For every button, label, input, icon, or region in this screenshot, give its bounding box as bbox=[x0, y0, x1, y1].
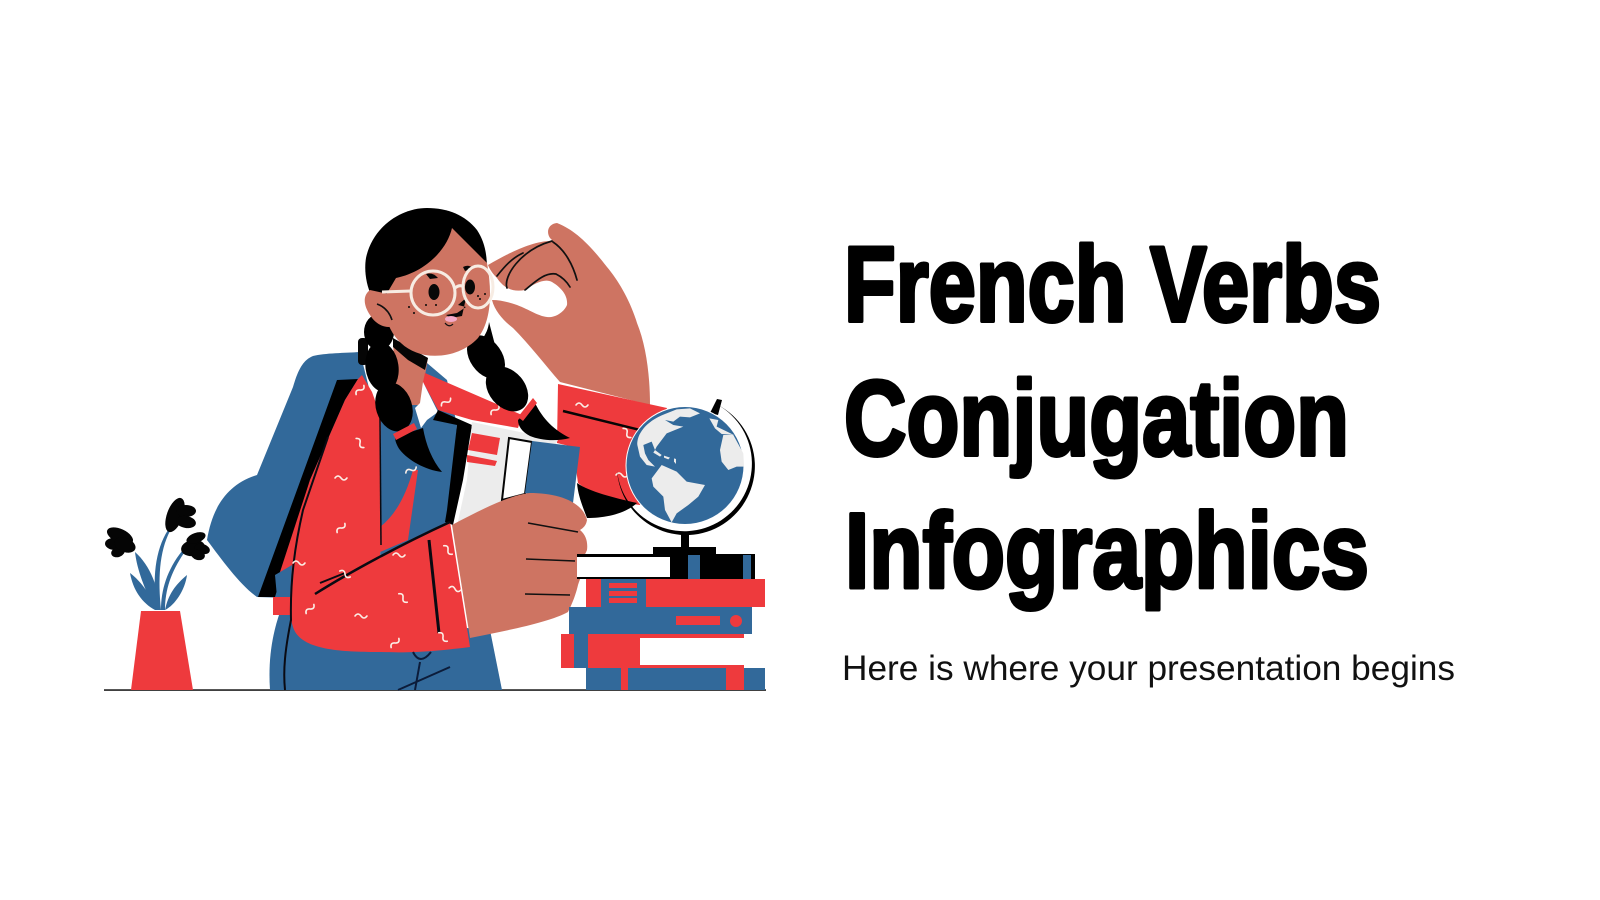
jacket squiggles bbox=[293, 384, 632, 649]
skin arm raised bbox=[488, 223, 650, 405]
eyebrow right bbox=[463, 266, 473, 271]
lower sleeve bbox=[290, 522, 470, 652]
mouth bbox=[445, 316, 457, 322]
white pages bbox=[502, 438, 532, 500]
continents bbox=[637, 408, 744, 522]
glasses bbox=[382, 266, 493, 315]
neck shadow bbox=[393, 338, 428, 370]
blue book label bbox=[676, 616, 720, 625]
right braid band bbox=[518, 398, 537, 421]
blue book dot bbox=[730, 615, 742, 627]
braid tail bbox=[518, 403, 570, 440]
title line 2: Conjugation bbox=[844, 358, 1349, 478]
jeans bbox=[269, 612, 502, 690]
nose bbox=[446, 298, 466, 318]
ear bbox=[365, 290, 398, 327]
blue book cover bbox=[525, 441, 580, 503]
bottom book bbox=[586, 668, 765, 690]
third book bbox=[561, 634, 744, 668]
top book band bbox=[688, 555, 700, 579]
third book pages bbox=[640, 638, 744, 665]
left braid band bbox=[393, 423, 417, 440]
top book band two bbox=[743, 555, 751, 579]
title line 1: French Verbs bbox=[844, 224, 1381, 344]
zipper pull bbox=[398, 652, 450, 690]
jacket hem bbox=[273, 597, 291, 615]
top book bbox=[577, 554, 755, 579]
globe pin bbox=[710, 399, 722, 415]
braid tail bbox=[395, 428, 442, 472]
grey book bbox=[455, 422, 558, 535]
vest blue patch bbox=[275, 565, 292, 597]
finger lines bbox=[497, 241, 577, 290]
sleeve fold line bbox=[563, 411, 640, 430]
globe bbox=[626, 406, 744, 525]
jacket lines bbox=[284, 417, 450, 690]
hair back bbox=[365, 208, 487, 320]
icon: potted plant bbox=[104, 495, 211, 690]
ground line bbox=[104, 689, 766, 691]
globe ocean bbox=[626, 407, 744, 524]
elbow shadow bbox=[577, 483, 637, 518]
plant stems and leaves bbox=[130, 530, 187, 610]
freckles bbox=[408, 293, 486, 314]
blue book bbox=[569, 607, 752, 634]
hand holding books bbox=[452, 493, 587, 638]
red book band bbox=[601, 579, 646, 607]
vase bbox=[131, 611, 193, 690]
bottom book band two bbox=[726, 668, 744, 690]
globe light rim bbox=[626, 406, 744, 525]
third book band bbox=[574, 634, 588, 668]
flowers bbox=[104, 495, 211, 562]
tie bbox=[380, 470, 418, 552]
globe base bbox=[653, 547, 716, 555]
face bbox=[383, 228, 490, 356]
backpack bbox=[207, 352, 372, 598]
collar bbox=[415, 382, 438, 428]
book red stripe bbox=[468, 433, 500, 455]
title bbox=[844, 224, 1381, 610]
red book lines bbox=[609, 583, 637, 603]
finger creases bbox=[525, 523, 578, 595]
illustration: student with books and globe bbox=[104, 208, 766, 691]
right shoulder sleeve bbox=[423, 373, 522, 428]
braid top bbox=[470, 322, 495, 352]
ear line bbox=[377, 304, 392, 320]
backpack loop bbox=[358, 338, 368, 365]
backpack strap bbox=[258, 379, 358, 597]
globe stand arc bbox=[617, 405, 755, 535]
book red stripe two bbox=[467, 455, 497, 466]
subtitle: Here is where your presentation begins bbox=[842, 649, 1455, 688]
lapel bbox=[433, 410, 472, 525]
top book pages bbox=[577, 557, 670, 577]
eyes bbox=[408, 266, 486, 314]
left braid bbox=[362, 314, 442, 472]
neck bbox=[393, 340, 428, 405]
upper arm sleeve bbox=[557, 384, 667, 505]
lip line bbox=[445, 323, 453, 326]
red book bbox=[586, 579, 765, 607]
book stack bbox=[561, 554, 765, 690]
held books bbox=[455, 422, 580, 535]
right braid bbox=[459, 322, 570, 440]
inner vest bbox=[380, 363, 457, 575]
jacket body bbox=[280, 375, 381, 610]
title line 3: Infographics bbox=[845, 490, 1369, 610]
globe stem bbox=[681, 534, 689, 548]
bottom book band bbox=[621, 668, 628, 690]
eyebrow left bbox=[426, 274, 438, 279]
